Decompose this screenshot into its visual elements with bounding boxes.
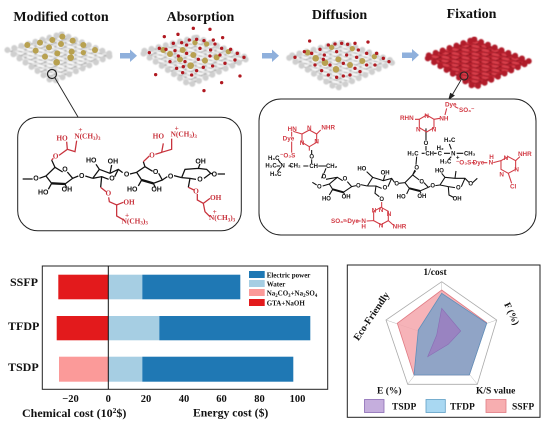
molecule: dye fixed on cellulose: N — [451, 151, 455, 157]
radar axis labels: F (%) — [501, 301, 521, 327]
category labels: TSDP — [8, 360, 39, 374]
series: SSFP — [397, 290, 487, 375]
series: TSDP — [428, 308, 461, 357]
molecule: dye fixed on cellulose: Dye — [473, 160, 485, 167]
molecule: dye fixed on cellulose: H₂C — [407, 151, 419, 157]
molecule: dye fixed on cellulose: N — [379, 207, 384, 214]
panel: dyed cotton molecular structure — [259, 99, 536, 235]
axis title: chemical cost: 2 — [113, 406, 117, 415]
arrow: absorption to diffusion — [262, 50, 279, 62]
molecule: dye fixed on cellulose: N — [387, 211, 392, 218]
molecule: dye fixed on cellulose: N — [504, 155, 509, 162]
molecule: cationised cellulose: O — [197, 176, 203, 183]
molecule: dye fixed on cellulose: N — [489, 160, 494, 167]
molecule: dye fixed on cellulose: N — [424, 113, 429, 120]
molecule: dye fixed on cellulose: SO₃⁻ — [459, 107, 474, 114]
category labels: SSFP — [10, 275, 38, 289]
molecule: cationised cellulose: N(CH — [171, 130, 189, 139]
molecule: dye fixed on cellulose: N — [416, 127, 421, 134]
molecule: dye fixed on cellulose: O — [317, 185, 322, 191]
molecule: dye fixed on cellulose: N — [379, 222, 384, 229]
molecule: dye fixed on cellulose: ⁻O₃S — [456, 160, 471, 167]
molecule: dye fixed on cellulose: O — [414, 166, 419, 172]
pointer: magnifier circle and arrow to the dyed structure — [449, 72, 468, 99]
title: Fixation: Fixation — [447, 7, 497, 22]
molecule: dye fixed on cellulose: CH₂ — [289, 164, 301, 170]
molecule: cationised cellulose: O — [33, 176, 39, 183]
molecule: cationised cellulose: + — [125, 210, 129, 219]
molecule: dye fixed on cellulose: Cl — [510, 184, 517, 191]
legend: Na — [267, 290, 275, 298]
legend: Water — [267, 280, 285, 288]
molecule: dye fixed on cellulose: SO₃⁻ — [331, 218, 346, 225]
molecule: dye fixed on cellulose: Dye — [445, 102, 457, 109]
molecule: dye fixed on cellulose: N — [499, 172, 504, 179]
molecule: cationised cellulose: O — [149, 150, 155, 159]
stacked bar chart: cost comparison — [8, 266, 328, 420]
molecule: cationised cellulose: ) — [192, 130, 195, 139]
molecule: dye fixed on cellulose: H₃C — [268, 156, 280, 162]
molecule: dye fixed on cellulose: HO — [357, 167, 367, 173]
bars: TFDP — [57, 316, 310, 340]
molecule: dye fixed on cellulose: H — [489, 154, 494, 161]
fabric: diffusion — [287, 39, 394, 88]
bars: TSDP — [59, 357, 293, 382]
molecule: cationised cellulose: OH — [108, 158, 118, 165]
molecule: dye fixed on cellulose: O — [379, 197, 384, 203]
molecule: dye fixed on cellulose: O — [343, 177, 348, 183]
molecule: dye fixed on cellulose: H₃C — [270, 172, 282, 178]
molecule: cationised cellulose: 3 — [98, 137, 101, 142]
legend: 2 — [275, 294, 278, 299]
molecule: dye fixed on cellulose: O — [309, 155, 314, 161]
molecule: dye fixed on cellulose: OH — [417, 194, 426, 200]
legend: SO — [306, 290, 315, 298]
title: Diffusion: Diffusion — [312, 8, 367, 23]
fabric: absorption — [141, 27, 248, 92]
category labels: TFDP — [8, 319, 39, 333]
axis title: chemical cost: $) — [116, 406, 126, 420]
pointer: magnifier circle and line to the cotton structure — [48, 70, 78, 117]
molecule: dye fixed on cellulose: Dye — [347, 218, 359, 225]
legend: 3 — [288, 294, 291, 299]
radar axis labels: Eco-Friendly — [352, 290, 392, 343]
molecule: dye fixed on cellulose: HO — [322, 197, 331, 203]
molecule: cationised cellulose: HO — [56, 134, 68, 143]
molecule: cationised cellulose: O — [53, 151, 59, 160]
molecule: cationised cellulose: N(CH — [209, 213, 228, 222]
molecule: dye fixed on cellulose: NHR — [321, 124, 335, 131]
legend — [249, 271, 318, 308]
molecule: dye fixed on cellulose: N — [372, 208, 377, 215]
panel: cotton molecular structure — [18, 117, 241, 231]
molecule: dye fixed on cellulose: Dye — [283, 136, 295, 143]
molecule: cationised cellulose: + — [213, 207, 217, 216]
legend: +Na — [291, 290, 304, 298]
molecule: cationised cellulose: OH — [151, 187, 162, 194]
molecule: dye fixed on cellulose: HN — [288, 126, 297, 133]
molecule: dye fixed on cellulose: H₂ — [437, 146, 444, 152]
radar axis labels: E (%) — [377, 385, 402, 396]
molecule: cationised cellulose: ) — [143, 216, 146, 225]
arrow: diffusion to fixation — [402, 49, 419, 62]
molecule: dye fixed on cellulose: H₃C — [444, 138, 456, 144]
molecule: cationised cellulose: O — [212, 171, 218, 178]
legend: 2 — [303, 294, 306, 299]
molecule: cationised cellulose: OH — [195, 158, 206, 165]
molecule: dye fixed on cellulose: N — [300, 140, 305, 147]
axis title: chemical cost: Chemical cost (10 — [22, 406, 113, 420]
molecule: cationised cellulose: O — [109, 176, 115, 183]
radar legend: TFDP — [450, 402, 475, 412]
molecule: dye fixed on cellulose: O — [356, 183, 361, 189]
title: Absorption: Absorption — [167, 10, 235, 25]
radar legend: SSFP — [512, 402, 534, 412]
molecule: cationised cellulose: O — [105, 189, 111, 198]
molecule: dye fixed on cellulose: H₃C — [440, 159, 452, 165]
bars: SSFP — [58, 275, 240, 299]
molecule: dye fixed on cellulose: N — [361, 218, 366, 225]
molecule: dye fixed on cellulose: CH — [309, 164, 318, 170]
molecule: dye fixed on cellulose: O — [383, 185, 388, 191]
legend: Electric power — [267, 272, 310, 280]
molecule: dye fixed on cellulose: O — [419, 180, 424, 186]
molecule: dye fixed on cellulose: + — [456, 155, 460, 161]
axis tick labels: 40 — [179, 394, 189, 405]
molecule: cationised cellulose: N(CH — [74, 132, 93, 141]
title: Modified cotton: Modified cotton — [13, 10, 109, 25]
molecule: dye fixed on cellulose: O — [456, 185, 461, 191]
molecule: dye fixed on cellulose: C — [438, 151, 443, 157]
fabric: modified cotton — [7, 34, 113, 82]
molecule: dye fixed on cellulose: N — [314, 138, 319, 145]
molecule: dye fixed on cellulose: N — [432, 127, 437, 134]
molecule: cationised cellulose: OH — [62, 187, 72, 194]
molecule: cationised cellulose — [23, 124, 236, 227]
series: TFDP — [414, 293, 487, 375]
molecule: cationised cellulose: HO — [38, 190, 49, 197]
molecule: cationised cellulose: O — [168, 173, 174, 180]
molecule: dye fixed on cellulose: H — [361, 224, 366, 231]
radar axis labels — [352, 268, 521, 396]
molecule: cationised cellulose: 3 — [140, 222, 143, 227]
arrow: modified cotton to absorption — [120, 50, 137, 62]
molecule: dye fixed on cellulose: N — [307, 125, 312, 132]
molecule: dye fixed on cellulose: N — [514, 167, 519, 174]
axis tick labels: −20 — [62, 394, 79, 405]
axis tick labels: 60 — [216, 394, 227, 405]
molecule: dye fixed on cellulose: CH₃ — [464, 151, 476, 157]
legend: CO — [278, 290, 289, 298]
radar grid — [386, 282, 497, 384]
molecule: dye fixed on cellulose: NH — [439, 115, 449, 122]
axis tick labels: 100 — [290, 394, 305, 405]
molecule: cationised cellulose: HO — [153, 132, 164, 141]
molecule: cationised cellulose: 3 — [233, 218, 236, 223]
axis tick labels — [62, 394, 305, 405]
axis tick labels: 0 — [106, 394, 111, 405]
molecule: cationised cellulose: N(CH — [122, 216, 140, 225]
molecule: dye fixed on cellulose: O — [322, 174, 327, 180]
molecule: cationised cellulose: O — [79, 173, 85, 180]
molecule: cationised cellulose: 3 — [194, 135, 197, 140]
molecule: dye fixed on cellulose: RHN — [400, 115, 414, 122]
molecule: cationised cellulose: HO — [86, 158, 97, 165]
molecule: cationised cellulose: HO — [127, 187, 138, 194]
molecule: cationised cellulose: OH — [123, 198, 135, 207]
molecule: cationised cellulose: 3 — [189, 135, 192, 140]
fabric: fixation (dyed red) — [425, 39, 530, 87]
molecule: dye fixed on cellulose: H₃C — [265, 164, 277, 170]
radar legend: TSDP — [392, 402, 416, 412]
molecule: cationised cellulose: ) — [96, 132, 99, 141]
molecule: dye fixed on cellulose: HO — [397, 194, 406, 200]
molecule: cationised cellulose: + — [175, 124, 179, 133]
molecule: dye fixed on cellulose: O — [468, 181, 473, 187]
molecule: dye fixed on cellulose: N — [280, 164, 285, 170]
molecule: dye fixed on cellulose: O — [430, 184, 435, 190]
molecule: dye fixed on cellulose: OH — [342, 194, 351, 200]
molecule: cationised cellulose: 3 — [93, 137, 96, 142]
molecule: dye fixed on cellulose: NHR — [393, 224, 407, 231]
molecule: cationised cellulose: OH — [210, 193, 222, 202]
radar axis labels: 1/cost — [423, 268, 447, 278]
legend: 4 — [315, 294, 318, 299]
molecule: dye fixed on cellulose: OH — [453, 197, 462, 203]
molecule: dye fixed on cellulose — [265, 102, 532, 231]
category labels — [8, 275, 39, 374]
molecule: dye fixed on cellulose: ⁻O₃S — [280, 153, 295, 160]
radar axis labels: K/S value — [476, 386, 515, 396]
molecule: cationised cellulose: + — [78, 125, 83, 134]
molecule: dye fixed on cellulose: CH₂ — [326, 164, 338, 170]
panel: radar chart — [347, 265, 540, 417]
axis title: energy cost: Energy cost ($) — [193, 406, 268, 420]
molecule: dye fixed on cellulose: CH — [425, 151, 434, 157]
molecule: dye fixed on cellulose: O — [394, 181, 399, 187]
molecule: dye fixed on cellulose: NHR — [518, 151, 532, 158]
molecule: cationised cellulose: 3 — [228, 218, 231, 223]
molecule: dye fixed on cellulose: O — [424, 141, 429, 147]
molecule: cationised cellulose: O — [153, 169, 159, 176]
molecule: dye fixed on cellulose: OH — [381, 171, 390, 177]
molecule: cationised cellulose: O — [62, 167, 68, 174]
molecule: dye fixed on cellulose: HO — [435, 169, 444, 175]
axis tick labels: 80 — [254, 394, 265, 405]
molecule: cationised cellulose: ) — [230, 213, 233, 222]
legend: GTA+NaOH — [267, 300, 305, 308]
axis tick labels: 20 — [141, 394, 151, 405]
molecule: cationised cellulose: O — [124, 171, 130, 178]
molecule: cationised cellulose: O — [193, 186, 199, 195]
radar legend — [364, 400, 534, 412]
molecule: cationised cellulose: 3 — [145, 222, 148, 227]
